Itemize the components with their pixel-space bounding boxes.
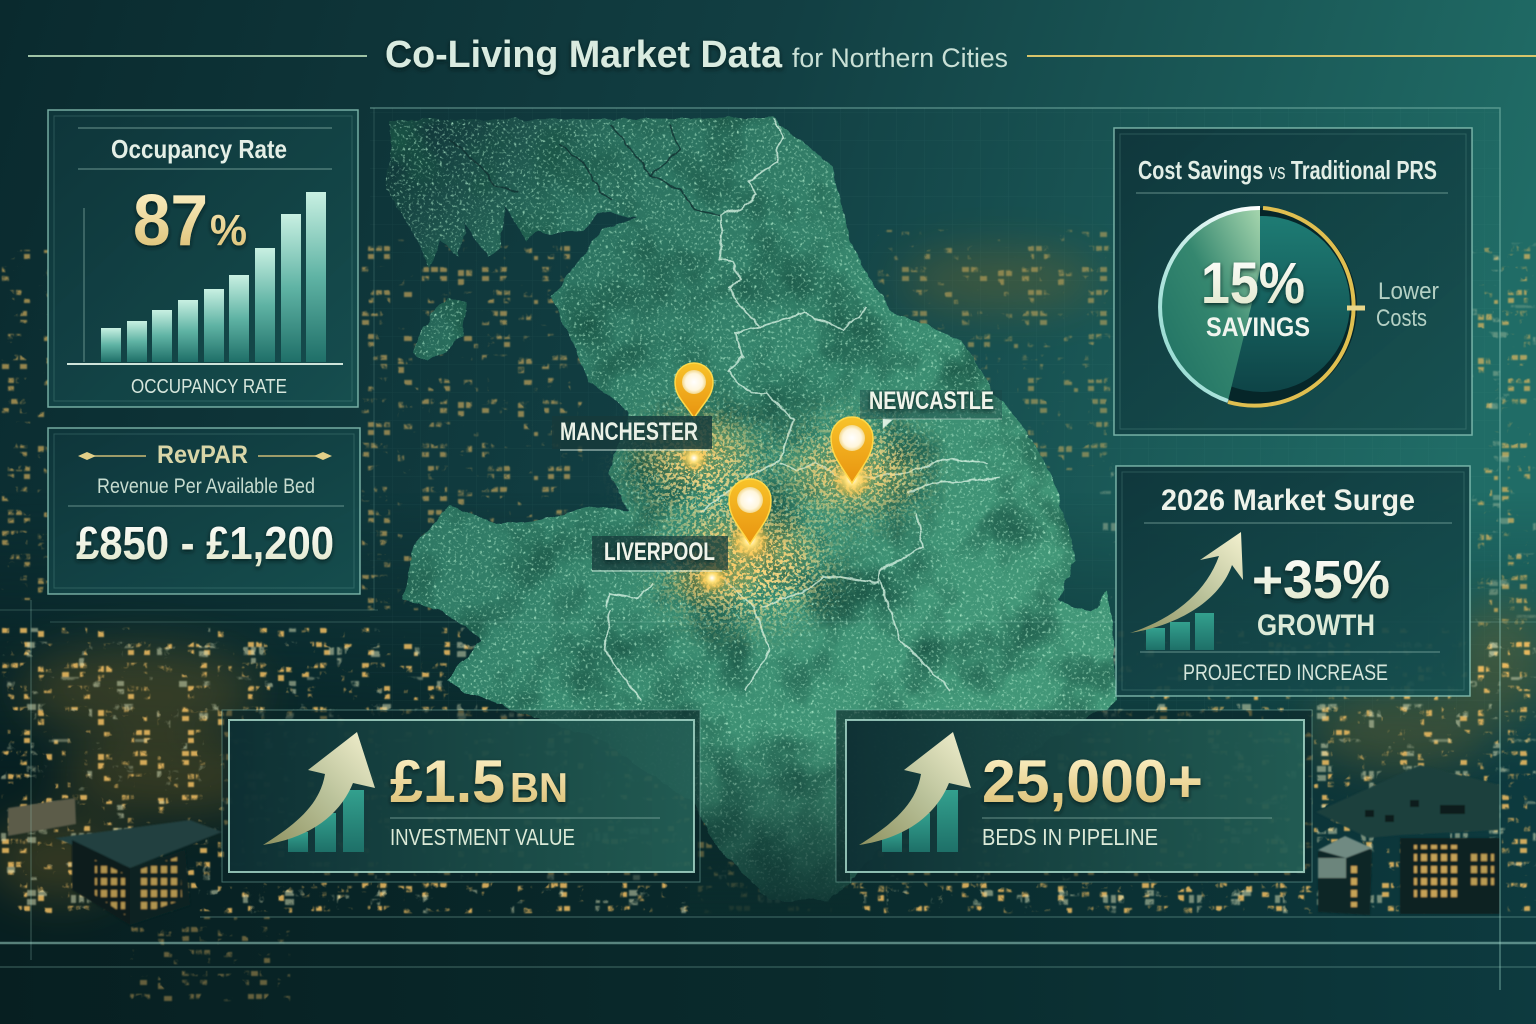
label: savings: SAVINGS — [1206, 312, 1310, 342]
title — [28, 34, 1536, 76]
icon: Manchester pin — [675, 363, 713, 418]
value: 1.5 billion: BN — [510, 764, 568, 811]
label: Newcastle: NEWCASTLE — [869, 387, 994, 415]
caption: projected increase: PROJECTED INCREASE — [1183, 660, 1388, 685]
value: 87 percent: % — [210, 206, 247, 255]
bar chart: occupancy — [67, 192, 343, 364]
marker: Newcastle — [831, 387, 1002, 499]
label: beds in pipeline: BEDS IN PIPELINE — [982, 824, 1158, 850]
value: 15 percent: 15% — [1201, 251, 1305, 316]
map of northern England — [387, 118, 1118, 915]
pie chart: 15 percent savings — [1159, 208, 1365, 406]
heading: RevPAR: RevPAR — [157, 441, 248, 469]
heading: market surge: 2026 Market Surge — [1161, 484, 1415, 517]
value: revpar range: £850 - £1,200 — [76, 517, 334, 569]
icon: Newcastle pin — [831, 417, 873, 483]
panel: 2026 market surge — [1116, 466, 1470, 696]
title: Co-Living Market Data — [385, 34, 783, 76]
panel: beds in pipeline — [836, 710, 1312, 882]
buildings left — [8, 798, 222, 925]
label: Manchester: MANCHESTER — [560, 418, 698, 446]
label: investment value: INVESTMENT VALUE — [390, 824, 575, 850]
panel: cost savings — [1114, 128, 1472, 435]
city lights backdrop — [0, 230, 1536, 1002]
panel: investment value — [222, 710, 700, 882]
icon: growth arrow — [1130, 532, 1243, 650]
panel: RevPAR — [48, 428, 360, 594]
panel: occupancy rate — [48, 110, 358, 407]
heading: occupancy rate: Occupancy Rate — [111, 134, 287, 164]
marker: Liverpool — [592, 479, 771, 592]
label: lower costs: Costs — [1376, 305, 1427, 332]
icon: growth arrow — [859, 732, 971, 852]
heading: cost savings: Cost Savings vs Traditional PRS — [1138, 155, 1437, 185]
label: Newcastle — [860, 387, 1002, 428]
fjord lines — [450, 125, 720, 215]
ornament lines — [78, 452, 332, 460]
title: for Northern Cities — [792, 43, 1008, 73]
icon: Liverpool pin — [729, 479, 771, 544]
label: Manchester — [552, 416, 712, 450]
value: 1.5 billion: £1.5 — [390, 748, 505, 815]
label: Liverpool: LIVERPOOL — [604, 538, 715, 566]
marker: Manchester — [552, 363, 713, 472]
city light glow — [625, 405, 927, 610]
label: lower costs: Lower — [1378, 278, 1439, 305]
regional borders — [605, 118, 1000, 700]
value: 25,000 plus: 25,000+ — [982, 748, 1203, 815]
label: growth: GROWTH — [1257, 609, 1375, 642]
warm city haze — [0, 250, 1536, 900]
value: 87 percent: 87 — [133, 181, 208, 261]
label: Liverpool — [592, 536, 728, 571]
icon: growth arrow — [263, 732, 375, 852]
subheading: revenue per available bed: Revenue Per Available Bed — [97, 475, 315, 498]
caption: occupancy rate: OCCUPANCY RATE — [131, 376, 287, 398]
value: plus 35 percent: +35% — [1252, 550, 1390, 610]
buildings right — [1316, 765, 1500, 915]
